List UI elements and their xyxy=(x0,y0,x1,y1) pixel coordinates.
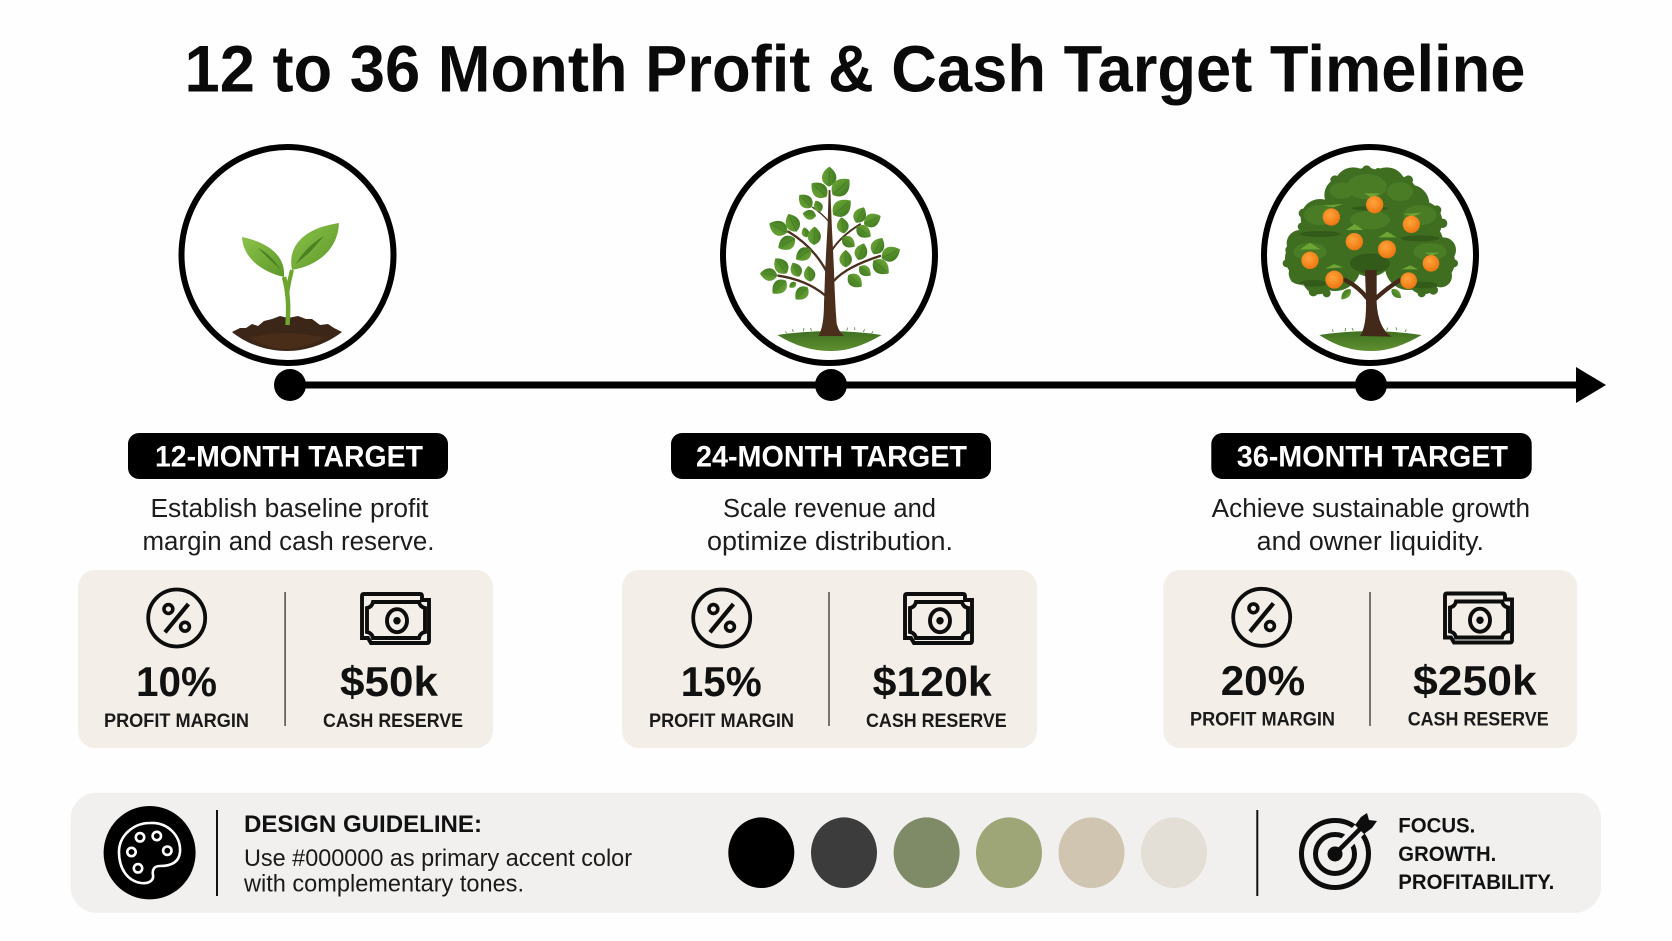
profit margin label: PROFIT MARGIN xyxy=(1190,708,1335,730)
cash reserve value: $250k xyxy=(1413,657,1537,704)
metrics card: 36-month xyxy=(1163,570,1577,748)
panel: 24-month target xyxy=(622,433,1037,748)
milestone dot: 24 months xyxy=(815,369,847,401)
slogan: PROFITABILITY. xyxy=(1398,871,1554,894)
guideline text: Use #000000 as primary accent color xyxy=(244,845,632,872)
description: 24-month: Scale revenue and xyxy=(723,495,936,523)
panel: 12-month target xyxy=(78,433,493,748)
guideline text: with complementary tones. xyxy=(243,870,524,898)
guideline heading: DESIGN GUIDELINE: xyxy=(244,811,482,838)
title: 12 to 36 Month Profit & Cash Target Timeline xyxy=(184,32,1526,106)
profit margin value: 10% xyxy=(136,658,217,705)
icon: young leafy tree in circle xyxy=(723,147,935,363)
description: 24-month xyxy=(707,495,953,556)
heading pill: 24-month: 24-MONTH TARGET xyxy=(696,440,967,474)
icon: banknote xyxy=(905,594,972,643)
cash reserve label: CASH RESERVE xyxy=(1408,708,1549,730)
description: 12-month: Establish baseline profit xyxy=(150,495,428,523)
colour swatches xyxy=(728,817,1207,888)
heading pill: 36-month: 36-MONTH TARGET xyxy=(1237,440,1508,474)
profit margin value: 20% xyxy=(1221,657,1305,704)
milestone dot: 36 months xyxy=(1355,369,1387,401)
timeline line with arrow xyxy=(290,367,1606,403)
profit margin label: PROFIT MARGIN xyxy=(104,710,249,732)
panel: design guideline footer xyxy=(70,793,1601,913)
metrics card: 12-month xyxy=(78,570,493,748)
icon: palette xyxy=(104,806,196,899)
heading pill: 12-month: 12-MONTH TARGET xyxy=(155,440,423,474)
icon: percent xyxy=(1233,589,1290,646)
profit margin label: PROFIT MARGIN xyxy=(649,710,794,732)
description: 36-month: Achieve sustainable growth xyxy=(1212,495,1530,523)
description: 36-month: and owner liquidity. xyxy=(1257,528,1484,556)
icon: orange tree in circle xyxy=(1264,147,1476,363)
guideline text xyxy=(243,845,632,898)
icon: banknote xyxy=(362,594,429,643)
description: 12-month: margin and cash reserve. xyxy=(142,528,434,556)
icon: target with arrow xyxy=(1302,813,1377,888)
milestone dot: 12 months xyxy=(274,369,306,401)
icon: percent xyxy=(148,590,205,646)
slogan xyxy=(1398,814,1554,894)
icon: percent xyxy=(693,590,750,646)
description: 12-month xyxy=(142,495,434,556)
profit margin value: 15% xyxy=(681,658,762,705)
heading pill: 12-month xyxy=(128,433,448,479)
slogan: GROWTH. xyxy=(1398,843,1496,866)
heading pill: 24-month xyxy=(671,433,991,479)
cash reserve label: CASH RESERVE xyxy=(323,710,463,732)
icon: sprout in circle xyxy=(182,147,394,363)
cash reserve value: $120k xyxy=(873,658,992,705)
panel: 36-month target xyxy=(1163,433,1577,748)
cash reserve label: CASH RESERVE xyxy=(866,710,1007,732)
metrics card: 24-month xyxy=(622,570,1037,748)
slogan: FOCUS. xyxy=(1398,814,1475,838)
description: 36-month xyxy=(1212,495,1530,556)
description: 24-month: optimize distribution. xyxy=(707,528,953,556)
heading pill: 36-month xyxy=(1211,433,1532,479)
icon: banknote xyxy=(1445,594,1512,642)
cash reserve value: $50k xyxy=(340,658,439,705)
